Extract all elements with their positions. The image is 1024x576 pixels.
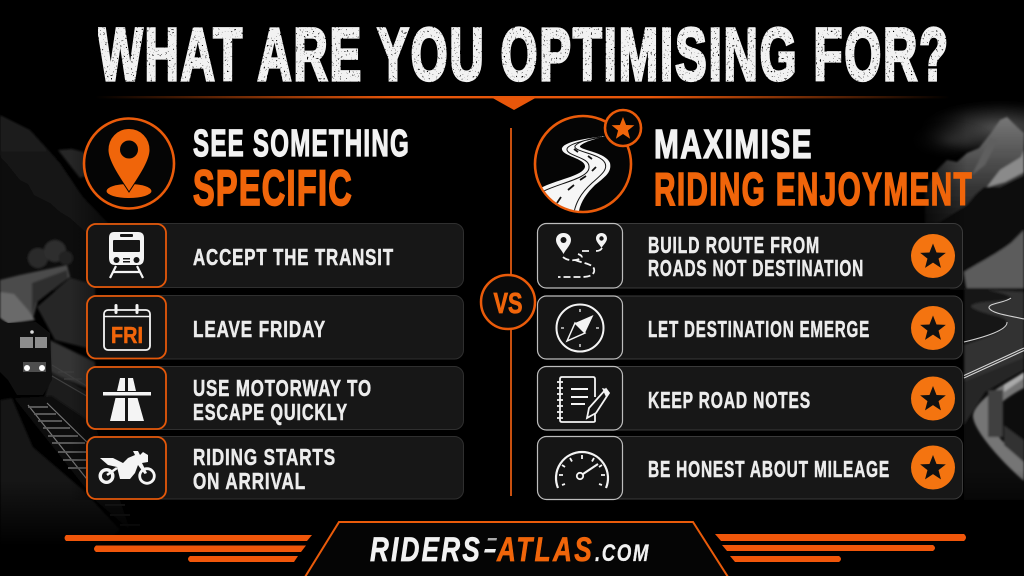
row: keep road notes [538,366,962,430]
left list [86,224,464,499]
row: be honest about mileage [538,436,962,500]
icon: winding road [535,110,641,220]
label: ACCEPT THE TRANSIT [193,244,394,270]
row: riding starts: ON ARRIVAL [193,468,306,494]
row: let destination emerge [538,296,962,359]
label: LEAVE FRIDAY [193,316,326,342]
icon: star [911,306,955,350]
row: use motorway [86,366,464,430]
speed lines left [64,535,312,562]
heading: maximise: MAXIMISE [654,121,813,167]
railway track [28,365,140,525]
icon: compass [556,304,604,352]
icon: calendar [104,304,150,350]
icon: star [911,376,955,420]
icon: motorcycle [100,451,154,483]
logo text: ATLAS [496,531,594,569]
row: leave friday [86,296,464,359]
background: mountains and train, left [0,100,140,576]
icon: star badge [605,110,641,146]
heading: specific: SPECIFIC [193,160,353,216]
logo text [370,531,650,569]
VS badge: VS [494,288,522,320]
footer logo plate [305,522,728,576]
label: RIDING STARTS [193,444,336,470]
row: riding starts [86,436,464,499]
guard rail [973,372,1024,481]
label: BUILD ROUTE FROM [648,232,820,258]
label: BE HONEST ABOUT MILEAGE [648,456,890,482]
train carriages [0,265,70,324]
icon: route map [556,233,607,277]
panel: maximise riding enjoyment [535,110,973,220]
icon: star [911,446,955,490]
label: USE MOTORWAY TO [193,375,372,401]
icon: star [911,234,955,278]
icon: train [109,232,144,278]
icon: notebook and pencil [557,377,609,422]
label: LET DESTINATION EMERGE [648,316,870,342]
icon: location pin [84,118,174,208]
logo text: RIDERS [370,531,482,569]
right list [538,224,962,500]
panel: see something specific [84,118,410,216]
heading: see something: SEE SOMETHING [193,123,410,165]
locomotive [0,320,52,395]
winding road markings [964,298,1024,378]
centre divider [510,128,512,496]
row: use motorway: ESCAPE QUICKLY [193,399,348,425]
speed lines right [715,534,966,562]
row: build route: ROADS NOT DESTINATION [648,255,864,281]
row: accept the transit [86,224,464,288]
label: KEEP ROAD NOTES [648,387,811,413]
icon: motorway [103,378,151,421]
icon: calendar: FRI [111,322,143,348]
row: build route [538,224,962,288]
logo text: .COM [595,540,650,567]
icon: speedometer [556,452,608,488]
VS badge [481,275,535,329]
title rule with pointer [95,96,950,110]
background: mountain and road, right [905,90,1024,576]
